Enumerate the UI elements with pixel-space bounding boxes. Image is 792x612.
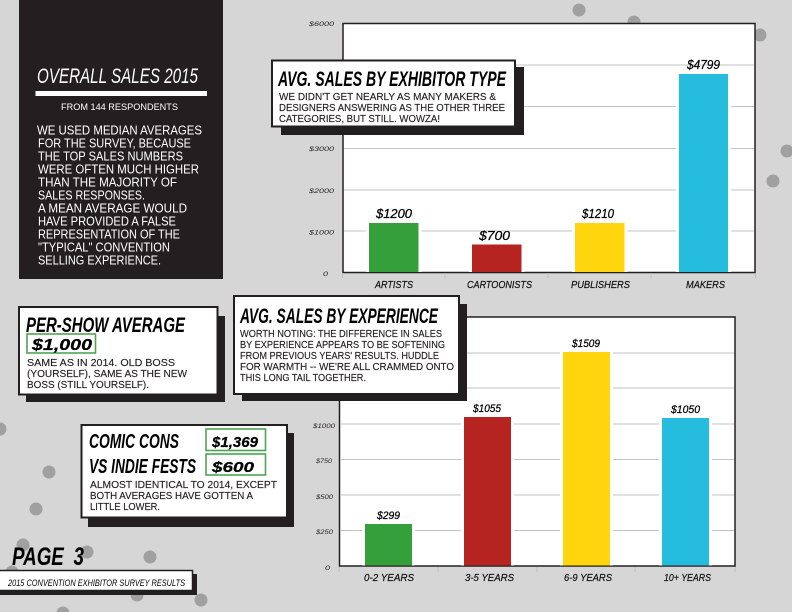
callout heading: AVG. SALES BY EXHIBITOR TYPE	[277, 68, 507, 91]
y axis labels: $6000	[308, 21, 335, 28]
value labels: $299	[376, 510, 400, 522]
stat: comic cons	[206, 429, 266, 451]
footer: survey title: 2015 CONVENTION EXHIBITOR SURVEY RESULTS	[7, 578, 185, 588]
y axis labels: $500	[315, 494, 333, 501]
callout body: CATEGORIES, BUT STILL. WOWZA!	[279, 113, 440, 125]
heading: overall sales 2015: OVERALL SALES 2015	[37, 65, 198, 88]
text block: median explanation: REPRESENTATION OF THE	[38, 228, 180, 242]
text block: median explanation: "TYPICAL" CONVENTION	[38, 240, 170, 254]
bar chart: sales by experience	[312, 317, 735, 584]
callout body: BY EXPERIENCE APPEARS TO BE SOFTENING	[240, 339, 445, 351]
callout body	[279, 91, 505, 125]
y axis labels: 0	[325, 565, 331, 572]
panel: comic cons vs indie fests	[82, 425, 294, 527]
value labels: $1050	[670, 404, 701, 416]
subheading: respondents: FROM 144 RESPONDENTS	[61, 102, 178, 112]
footer: survey title	[0, 570, 197, 595]
stat: indie fests: $600	[211, 459, 255, 476]
y axis labels: $250	[315, 529, 333, 536]
value labels	[375, 57, 720, 243]
bar: artists	[369, 223, 418, 272]
text block: median explanation: WERE OFTEN MUCH HIGHER	[38, 162, 199, 176]
value labels: $4799	[686, 57, 720, 72]
body text: ALMOST IDENTICAL TO 2014, EXCEPT	[90, 479, 278, 491]
bar: cartoonists	[472, 244, 522, 272]
body text: SAME AS IN 2014. OLD BOSS	[27, 357, 175, 369]
category labels	[374, 280, 725, 291]
callout body: THIS LONG TAIL TOGETHER.	[240, 372, 366, 384]
stat: comic cons: $1,369	[211, 435, 258, 451]
body text: (YOURSELF), SAME AS THE NEW	[27, 368, 187, 380]
callout body: FROM PREVIOUS YEARS' RESULTS. HUDDLE	[240, 350, 439, 362]
y axis labels	[308, 21, 335, 278]
y axis labels: $3000	[308, 146, 335, 153]
callout body: FOR WARMTH -- WE'RE ALL CRAMMED ONTO	[240, 361, 454, 373]
callout: avg sales by exhibitor type	[272, 60, 524, 135]
text block: median explanation: WE USED MEDIAN AVERAGES	[37, 124, 202, 138]
value labels: $1509	[571, 338, 600, 350]
category labels: 3-5 YEARS	[465, 573, 514, 584]
bar chart: sales by exhibitor type	[308, 21, 756, 291]
bar: 6-9 years	[563, 352, 610, 566]
y axis labels: $2000	[308, 188, 335, 195]
body text	[90, 479, 278, 513]
value labels: $1210	[581, 206, 615, 221]
panel: per-show average	[19, 307, 225, 402]
body text: BOSS (STILL YOURSELF).	[27, 379, 149, 391]
body text	[27, 357, 187, 391]
y axis labels: $750	[315, 458, 332, 465]
y axis labels: $1000	[308, 230, 335, 236]
stat: per-show value: $1,000	[31, 337, 92, 354]
heading	[89, 431, 196, 478]
panel: overall sales intro	[19, 0, 223, 279]
heading: VS INDIE FESTS	[89, 456, 196, 478]
heading: COMIC CONS	[89, 431, 179, 453]
value labels: $1200	[375, 206, 413, 221]
text block: median explanation: SELLING EXPERIENCE.	[38, 254, 161, 268]
body text: BOTH AVERAGES HAVE GOTTEN A	[90, 490, 253, 502]
category labels: ARTISTS	[374, 280, 413, 291]
text block: median explanation: SALES RESPONSES.	[38, 188, 145, 202]
bar: makers	[679, 74, 728, 272]
category labels: PUBLISHERS	[571, 280, 630, 291]
callout body: WE DIDN'T GET NEARLY AS MANY MAKERS &	[279, 91, 496, 103]
callout body	[240, 328, 454, 384]
stat: per-show value	[27, 334, 96, 354]
text block: median explanation: THAN THE MAJORITY OF	[38, 176, 177, 190]
text block: median explanation: HAVE PROVIDED A FALSE	[38, 214, 176, 228]
category labels: 10+ YEARS	[664, 573, 711, 584]
y axis labels	[312, 423, 335, 572]
bar: 0-2 years	[365, 524, 412, 566]
heading: PER-SHOW AVERAGE	[26, 314, 186, 337]
text block: median explanation: FOR THE SURVEY, BECAUSE	[38, 136, 191, 150]
bar: publishers	[575, 223, 624, 272]
text block: median explanation	[37, 124, 202, 268]
page number: PAGE 3	[12, 543, 84, 571]
y axis labels: $1000	[312, 423, 335, 430]
callout body: WORTH NOTING: THE DIFFERENCE IN SALES	[240, 328, 442, 340]
stat: indie fests	[206, 454, 266, 476]
category labels: CARTOONISTS	[467, 280, 532, 291]
value labels	[376, 338, 701, 522]
y axis labels: 0	[323, 271, 329, 278]
category labels: MAKERS	[686, 280, 725, 291]
text block: median explanation: A MEAN AVERAGE WOULD	[38, 202, 187, 216]
value labels: $700	[478, 228, 511, 243]
text block: median explanation: THE TOP SALES NUMBERS	[38, 150, 183, 164]
category labels: 6-9 YEARS	[564, 573, 612, 584]
callout body: DESIGNERS ANSWERING AS THE OTHER THREE	[279, 102, 505, 114]
bar: 10+ years	[662, 418, 709, 566]
body text: LITTLE LOWER.	[90, 501, 160, 513]
bar: 3-5 years	[464, 417, 511, 566]
category labels: 0-2 YEARS	[364, 573, 414, 584]
value labels: $1055	[472, 403, 502, 415]
callout: avg sales by experience	[234, 296, 467, 401]
category labels	[364, 573, 711, 584]
callout heading: AVG. SALES BY EXPERIENCE	[239, 305, 439, 328]
